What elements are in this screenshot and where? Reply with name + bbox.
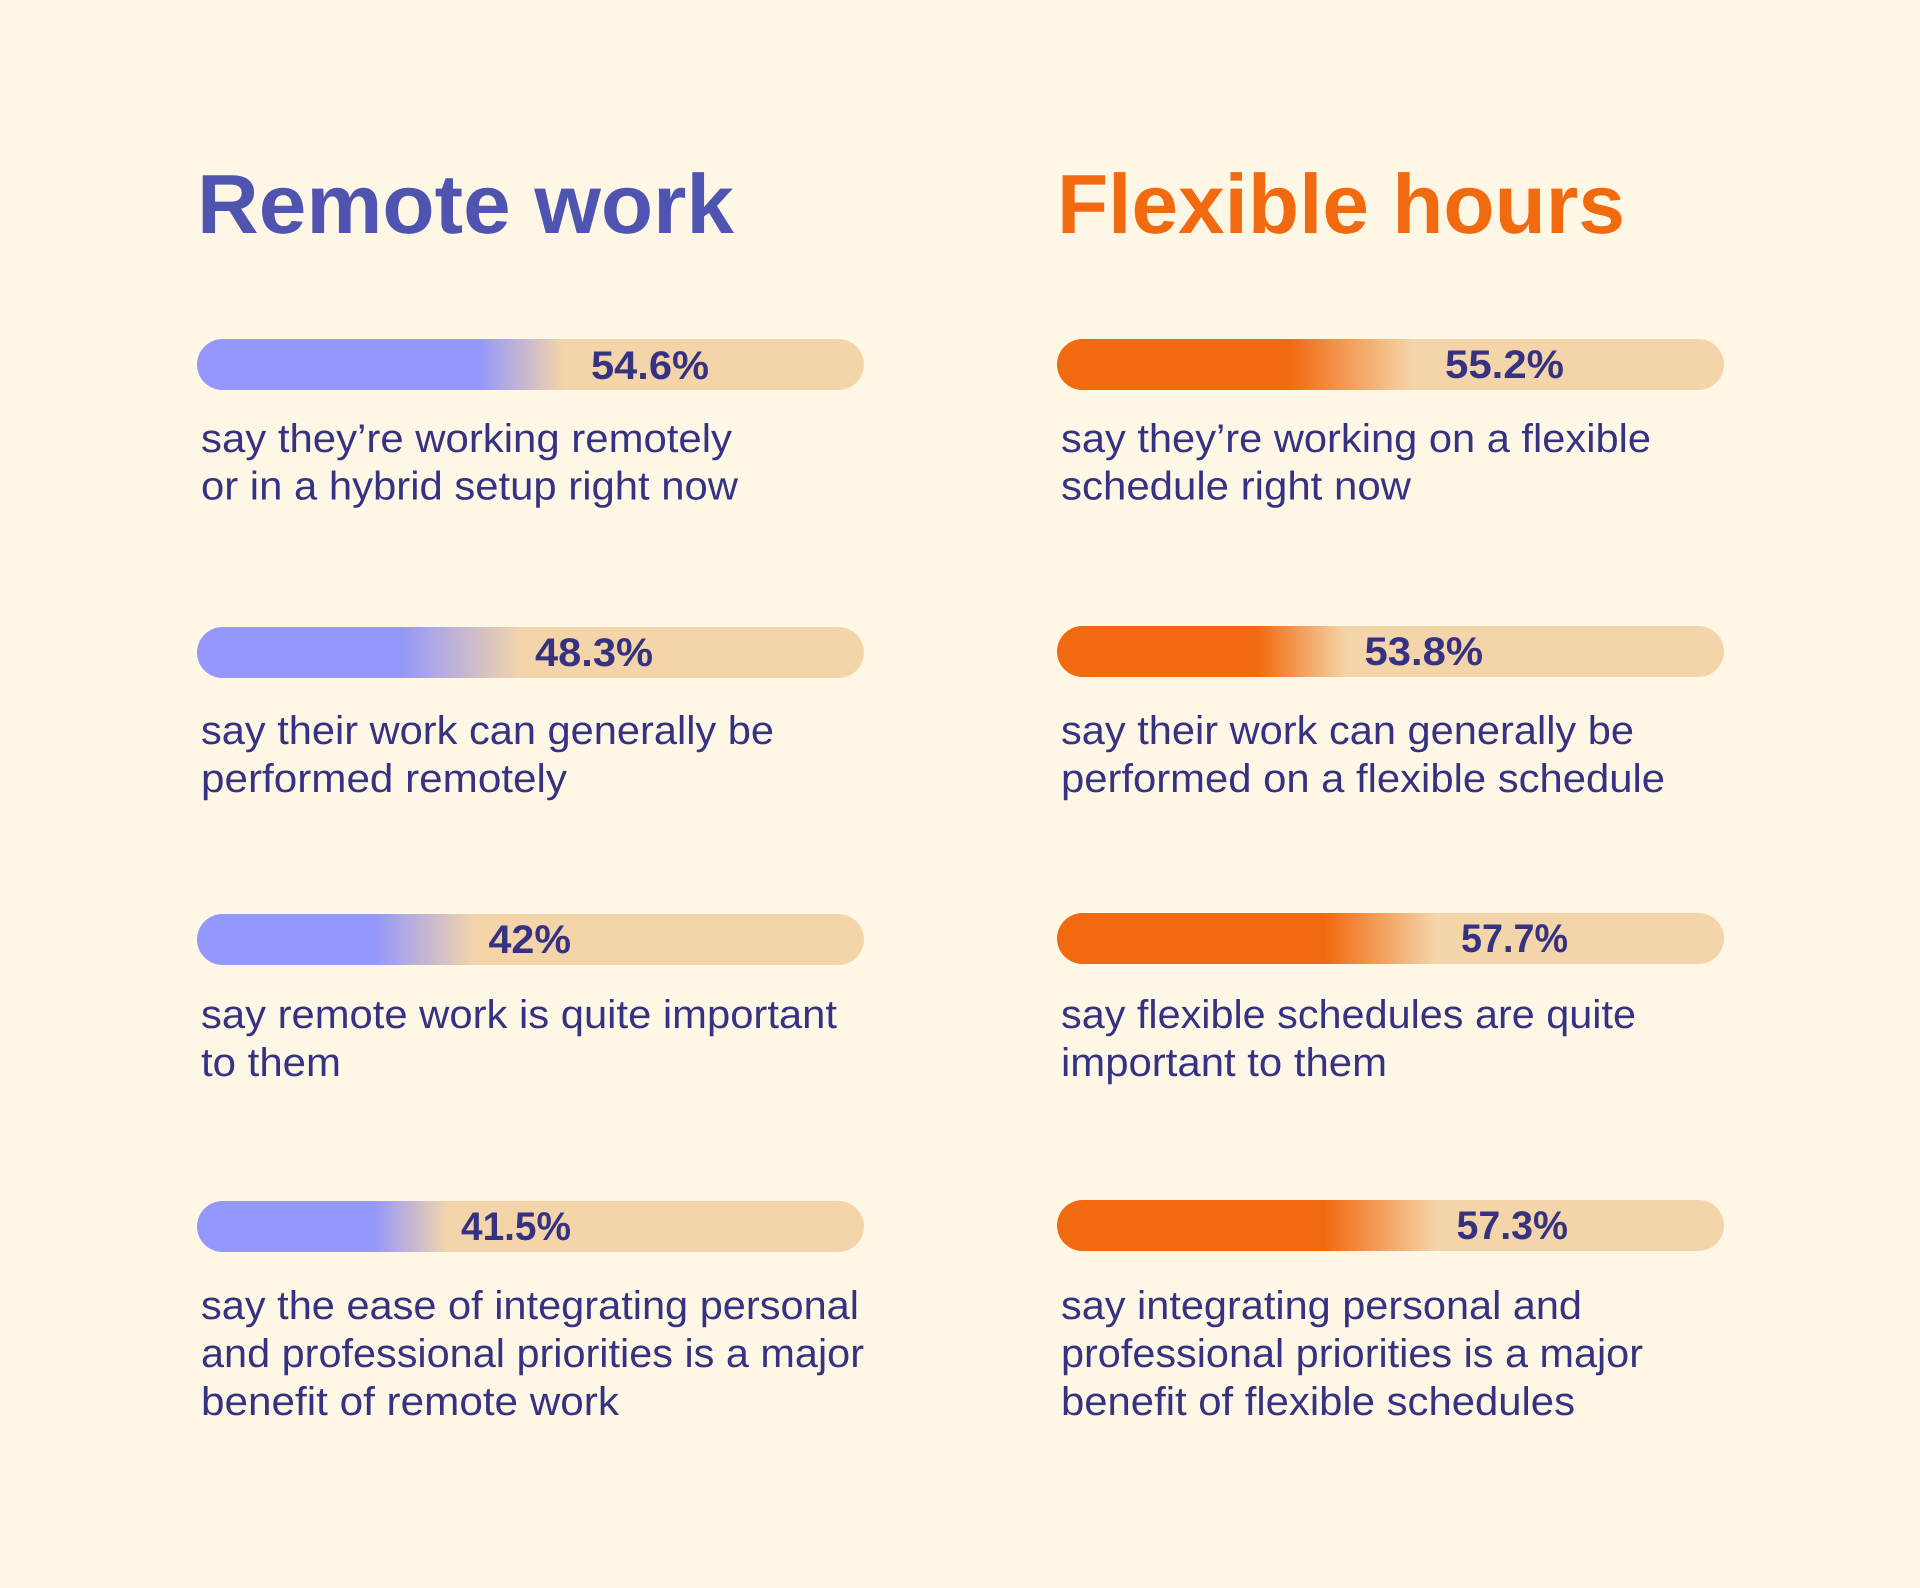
progress bar 41.5% [197, 1201, 864, 1252]
stat row: remote 42% [197, 914, 864, 1085]
description: benefit of remote work [201, 1380, 620, 1424]
progress bar 55.2% [1057, 339, 1724, 390]
description: professional priorities is a major [1061, 1332, 1643, 1376]
description [201, 993, 837, 1085]
heading: Flexible hours: Flexible hours [1057, 157, 1625, 251]
description [1061, 993, 1636, 1085]
description: and professional priorities is a major [201, 1332, 864, 1376]
stat row: flexible 53.8% [1057, 626, 1724, 801]
description: important to them [1061, 1041, 1387, 1085]
value 42%: 42% [488, 918, 571, 962]
description: say they’re working remotely [201, 417, 732, 461]
stat row: remote 48.3% [197, 627, 864, 801]
description: say their work can generally be [201, 709, 774, 753]
panel: Flexible hours column [1057, 157, 1724, 1424]
description [1061, 417, 1651, 508]
description: performed remotely [201, 757, 567, 801]
description: say the ease of integrating personal [201, 1284, 859, 1328]
description: say remote work is quite important [201, 993, 837, 1037]
description [1061, 709, 1665, 801]
value 53.8%: 53.8% [1364, 630, 1483, 674]
progress bar 48.3% [197, 627, 864, 678]
stat row: flexible 55.2% [1057, 339, 1724, 508]
progress bar 42% [197, 914, 864, 965]
description [201, 709, 774, 801]
stat row: remote 54.6% [197, 339, 864, 508]
value 55.2%: 55.2% [1445, 343, 1564, 387]
description: or in a hybrid setup right now [201, 464, 738, 508]
heading: Remote work: Remote work [197, 157, 734, 251]
description: say integrating personal and [1061, 1284, 1582, 1328]
progress bar 54.6% [197, 339, 864, 390]
value 54.6%: 54.6% [591, 344, 709, 388]
description: say flexible schedules are quite [1061, 993, 1636, 1037]
value 57.3%: 57.3% [1456, 1204, 1568, 1248]
description: to them [201, 1041, 341, 1085]
description [201, 1284, 864, 1424]
progress bar 57.7% [1057, 913, 1724, 964]
description: benefit of flexible schedules [1061, 1380, 1575, 1424]
progress bar 53.8% [1057, 626, 1724, 677]
description: say their work can generally be [1061, 709, 1634, 753]
description [1061, 1284, 1643, 1424]
progress bar 57.3% [1057, 1200, 1724, 1251]
description [201, 417, 738, 508]
value 41.5%: 41.5% [461, 1205, 571, 1249]
value 57.7%: 57.7% [1461, 917, 1568, 961]
stat row: flexible 57.7% [1057, 913, 1724, 1085]
description: say they’re working on a flexible [1061, 417, 1651, 461]
stat row: flexible 57.3% [1057, 1200, 1724, 1424]
value 48.3%: 48.3% [535, 631, 653, 675]
stat row: remote 41.5% [197, 1201, 864, 1424]
panel: Remote work column [197, 157, 864, 1424]
description: performed on a flexible schedule [1061, 757, 1665, 801]
description: schedule right now [1061, 464, 1411, 508]
